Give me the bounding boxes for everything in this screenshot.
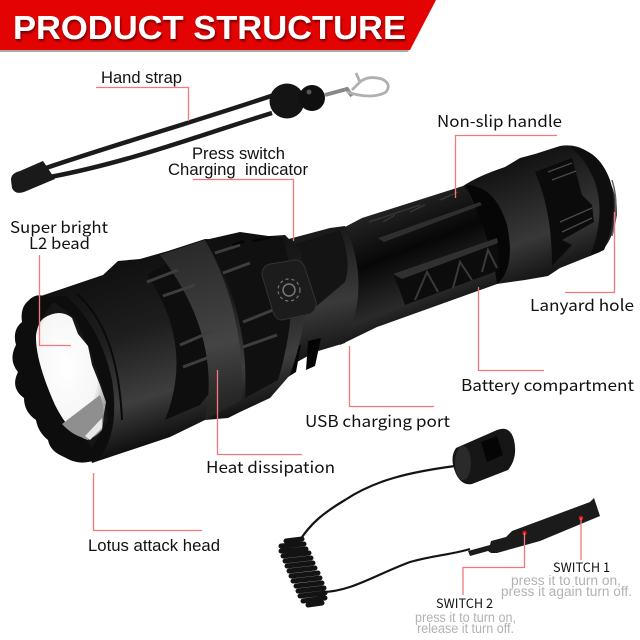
label: heat dissipation: [206, 370, 335, 478]
label: lanyard hole: Lanyard hole: [530, 292, 634, 316]
remote pressure switch illustration: [281, 429, 600, 605]
label: lanyard hole: [530, 212, 634, 316]
label: switch 1: [501, 516, 632, 599]
label: super bright bead: L2 bead: [29, 230, 90, 254]
tube: [468, 498, 600, 556]
head body: [35, 235, 306, 463]
label: lotus attack head: Lotus attack head: [88, 537, 220, 555]
label: press switch, charging indicator: Charging indicator: [168, 161, 309, 179]
flashlight illustration: [12, 145, 617, 463]
banner: [0, 0, 436, 52]
label: press switch, charging indicator: Press switch: [192, 145, 285, 163]
head grip rings: [147, 249, 223, 420]
label: switch 2: SWITCH 2: [436, 593, 493, 612]
label: battery compartment: Battery compartment: [461, 372, 634, 396]
bezel: [12, 295, 114, 463]
title: PRODUCT STRUCTURE: [13, 9, 406, 46]
label: hand strap: [96, 69, 188, 121]
label: non-slip handle: [437, 108, 562, 198]
label: usb charging port: USB charging port: [305, 408, 450, 432]
label: non-slip handle: Non-slip handle: [437, 108, 562, 132]
label: switch 1: SWITCH 1: [553, 557, 610, 576]
lens: [36, 313, 106, 440]
label: super bright bead: Super bright: [10, 214, 108, 238]
handle: [340, 186, 497, 345]
label: super bright bead: [10, 214, 108, 346]
label: lotus attack head: [88, 473, 220, 555]
label: press switch, charging indicator: [168, 145, 309, 241]
label: switch 2: [415, 531, 527, 636]
switch housing neck: [285, 226, 358, 366]
power button: [262, 260, 316, 320]
coil: [281, 539, 325, 605]
cap: [452, 429, 515, 484]
front cylinder edge: [77, 294, 122, 420]
label: switch 2: release it turn off.: [417, 621, 514, 636]
label: switch 1: press it to turn on,: [511, 573, 621, 588]
tail cap: [463, 145, 617, 284]
label: usb charging port: [305, 346, 450, 432]
label: battery compartment: [461, 287, 634, 396]
label: heat dissipation: Heat dissipation: [206, 454, 335, 478]
hand strap illustration: [11, 73, 388, 193]
label: switch 1: press it again turn off.: [501, 584, 632, 599]
label: hand strap: Hand strap: [101, 69, 182, 87]
label: switch 2: press it to turn on,: [415, 610, 516, 625]
